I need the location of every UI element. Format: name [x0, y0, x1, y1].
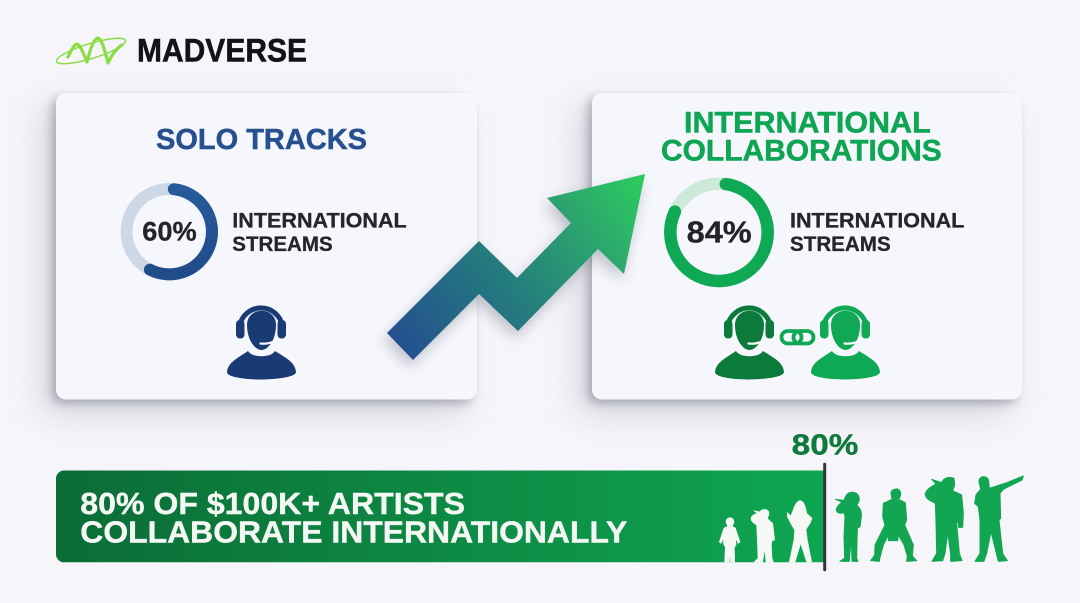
donut chart: 84%: 84%	[687, 214, 752, 249]
icon: white silhouettes inside bar	[719, 501, 812, 562]
logo	[54, 32, 307, 69]
panel: solo tracks	[56, 93, 477, 400]
donut chart: 84%	[670, 184, 768, 281]
icon: artist with headset	[227, 308, 296, 380]
heading: solo tracks: SOLO TRACKS	[156, 124, 367, 156]
heading: international collaborations: INTERNATIONAL	[684, 106, 931, 140]
icon: chain link	[782, 331, 814, 344]
arrow: rising trend	[387, 174, 645, 360]
donut chart: 60%	[127, 189, 212, 274]
label: international streams: STREAMS	[790, 233, 891, 256]
heading: international collaborations: COLLABORATIONS	[661, 134, 942, 167]
logo wordmark: MADVERSE	[137, 32, 307, 68]
donut chart: 60%: 60%	[142, 217, 197, 247]
icon: first collaborating artist	[715, 308, 784, 380]
label: international streams	[232, 209, 407, 256]
heading: international collaborations	[661, 106, 942, 167]
banner text: COLLABORATE INTERNATIONALLY	[80, 514, 628, 549]
label: international streams	[790, 209, 964, 256]
banner: 80% of $100K+ artists	[56, 470, 824, 562]
label: international streams: INTERNATIONAL	[790, 209, 964, 232]
marker: 80% divider	[792, 429, 859, 571]
icon: logo wave	[54, 33, 128, 69]
banner text	[80, 486, 628, 549]
banner text: 80% OF $100K+ ARTISTS	[80, 486, 465, 521]
label: international streams: STREAMS	[232, 233, 333, 256]
panel: international collaborations	[592, 93, 1022, 400]
label: international streams: INTERNATIONAL	[232, 209, 407, 232]
icon: second collaborating artist	[811, 308, 880, 380]
icon: green silhouettes outside bar	[835, 476, 1023, 561]
marker label: 80%: 80%	[792, 429, 859, 461]
